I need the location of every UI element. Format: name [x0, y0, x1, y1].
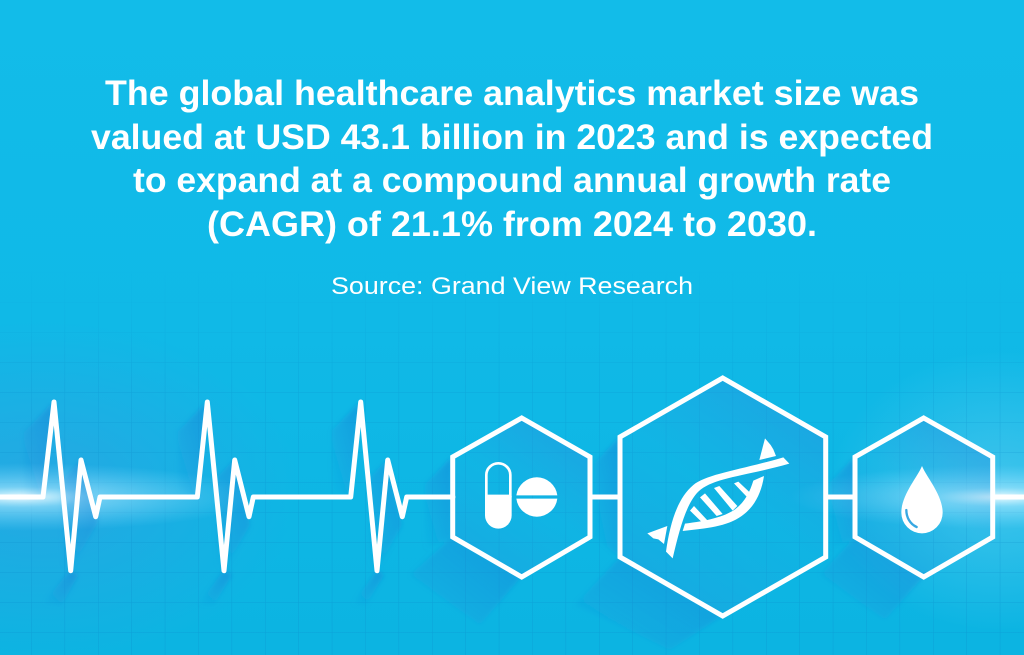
- ECG heartbeat line: [0, 402, 453, 571]
- title: (CAGR) of 21.1% from 2024 to 2030.: [207, 205, 817, 244]
- background: [0, 314, 1024, 655]
- hexagon: blood drop: [855, 418, 993, 577]
- diagonal long shadows: [24, 402, 923, 650]
- title: The global healthcare analytics market size was: [105, 74, 919, 113]
- title: [91, 74, 933, 244]
- icon: capsule and tablet: [485, 463, 557, 529]
- title: to expand at a compound annual growth rate: [133, 161, 891, 200]
- hexagon: DNA: [620, 378, 826, 616]
- connector: DNA to drop: [825, 494, 855, 500]
- connector: pill to DNA: [590, 494, 620, 500]
- icon: drop: [901, 466, 943, 533]
- hexagon: pills: [453, 418, 590, 577]
- title: valued at USD 43.1 billion in 2023 and is expected: [91, 118, 933, 157]
- icon: DNA helix: [647, 438, 789, 558]
- connector: drop to edge: [992, 494, 1024, 500]
- source line: Source: Grand View Research: [331, 273, 693, 300]
